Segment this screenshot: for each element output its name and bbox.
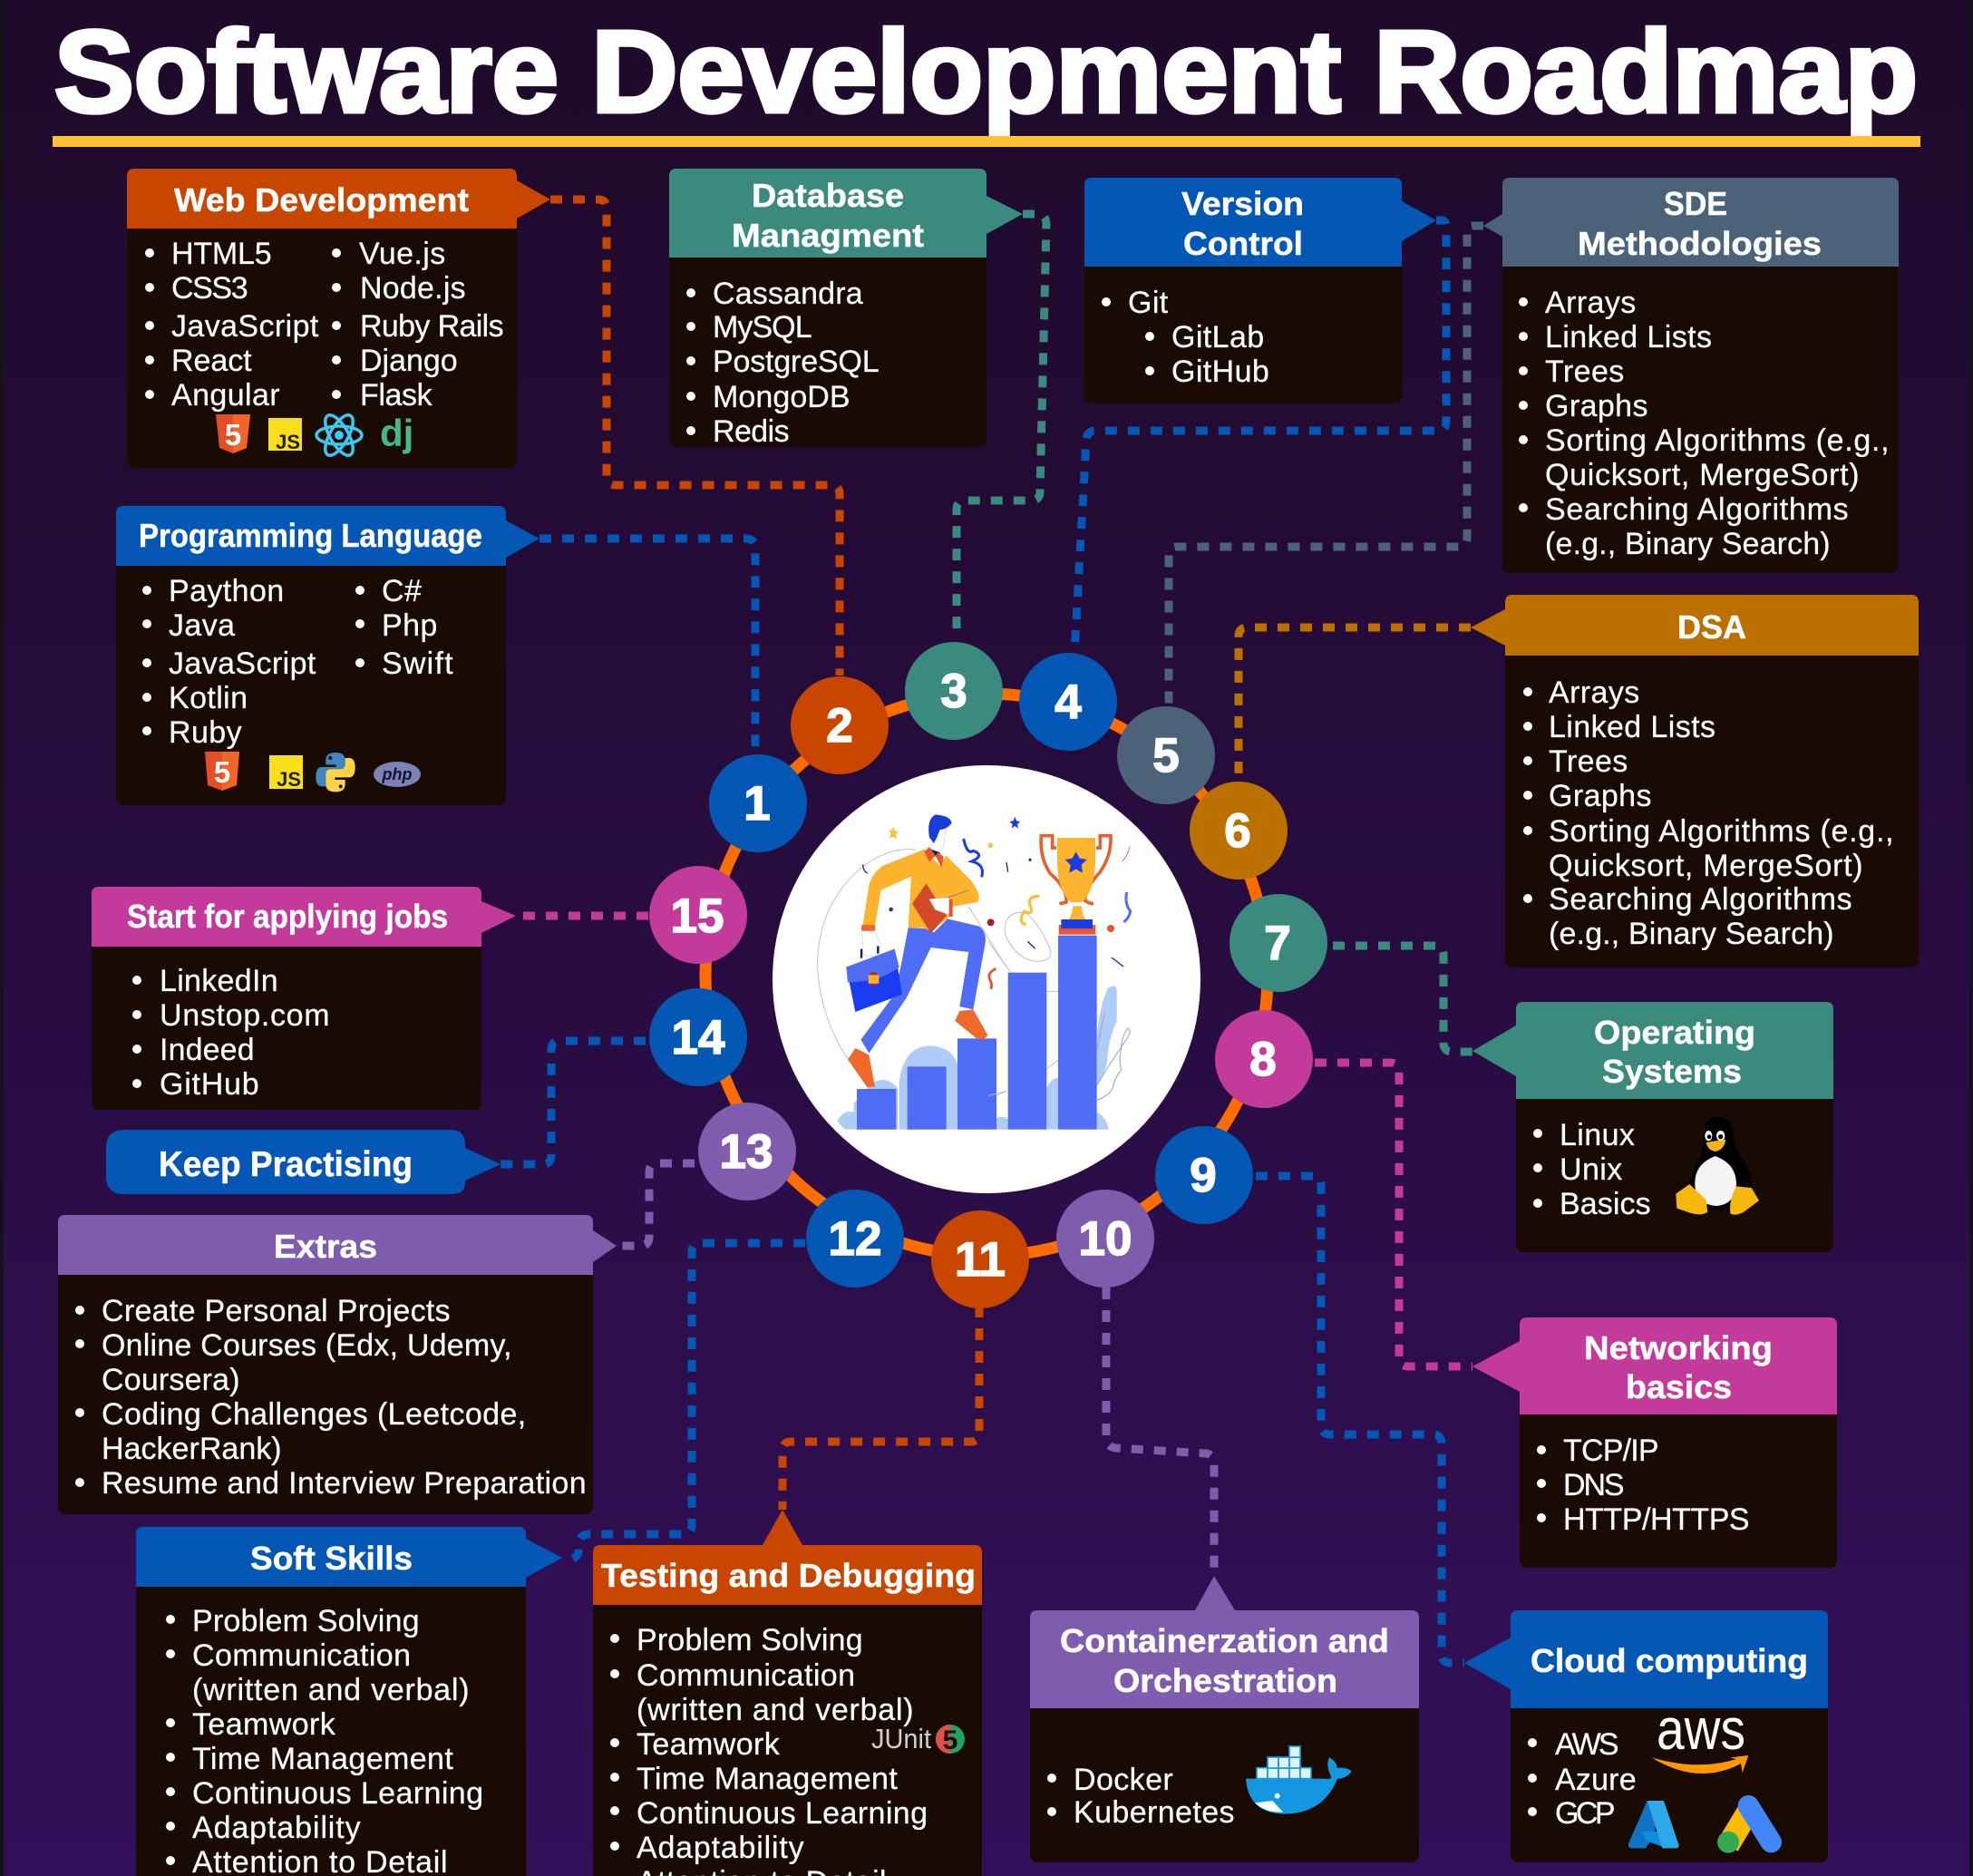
list: DSA topics: Arrays (1549, 676, 1640, 710)
numbered steps: 10 (1079, 1212, 1132, 1266)
banner: keep practising: Keep Practising (159, 1145, 413, 1184)
list: web technologies: Node.js (360, 271, 466, 306)
list: operating systems (1533, 1118, 1651, 1221)
list: operating systems: Linux (1560, 1118, 1635, 1152)
list: job sites (132, 964, 330, 1102)
heading: cloud computing (1464, 1610, 1828, 1708)
list: languages: Paython (169, 574, 285, 608)
list: testing topics: Teamwork (637, 1727, 781, 1762)
list: soft skills: Teamwork (192, 1707, 336, 1742)
title underline (53, 136, 1920, 147)
heading: containerization and orchestration (1030, 1576, 1419, 1708)
heading: start for applying jobs: Start for applying jobs (127, 898, 448, 935)
numbered steps: 9 (1190, 1149, 1217, 1202)
heading: DSA: DSA (1677, 608, 1746, 646)
list: SDE topics: Arrays (1545, 286, 1637, 320)
heading: networking basics: Networking (1584, 1329, 1773, 1366)
icon: JUnit 5: JUnit (871, 1723, 931, 1754)
ring connecting the steps (705, 694, 1268, 1256)
heading: database management: Managment (732, 217, 924, 254)
panel: cloud computing (1464, 1610, 1828, 1862)
numbered steps: 6 (1224, 804, 1251, 858)
list: databases: MySQL (713, 310, 812, 345)
list: web technologies: HTML5 (171, 237, 272, 271)
list: job sites: LinkedIn (160, 964, 278, 998)
heading: operating systems: Systems (1602, 1053, 1742, 1090)
list: web technologies: CSS3 (171, 271, 248, 306)
heading: DSA (1471, 595, 1919, 656)
heading: database management: Database (752, 177, 904, 214)
list: DSA topics: Graphs (1549, 779, 1652, 813)
panel: version control (1084, 178, 1436, 403)
list: databases: Cassandra (713, 277, 863, 311)
heading: SDE methodologies: Methodologies (1578, 225, 1822, 262)
list: job sites: Unstop.com (160, 998, 330, 1033)
list: web technologies: JavaScript (171, 309, 319, 344)
list: version control tools: GitLab (1171, 320, 1265, 355)
list: languages (142, 574, 453, 750)
icons: html5, js, react, django: dj (380, 412, 413, 454)
list: cloud providers: AWS (1555, 1727, 1619, 1762)
list: operating systems: Unix (1560, 1152, 1623, 1187)
heading: version control: Version (1181, 185, 1304, 222)
list: cloud providers: Azure (1555, 1763, 1637, 1797)
heading: testing and debugging (593, 1510, 982, 1605)
list: SDE topics: Trees (1545, 355, 1625, 389)
list: SDE topics: Searching Algorithms (1545, 492, 1849, 527)
list: web technologies: Django (360, 344, 458, 378)
list: DSA topics: Quicksort, MergeSort) (1549, 849, 1863, 883)
heading: extras: Extras (274, 1228, 377, 1265)
list: web technologies: Vue.js (359, 237, 446, 271)
list: testing topics: (written and verbal) (637, 1693, 914, 1727)
list: job sites: GitHub (160, 1067, 259, 1102)
list: databases: Redis (713, 414, 790, 449)
panel: operating systems (1472, 1002, 1833, 1252)
heading: programming language (116, 506, 539, 566)
list: testing topics (610, 1623, 928, 1876)
numbered steps: 5 (1152, 729, 1180, 782)
list: version control tools: Git (1128, 286, 1169, 320)
heading: extras (58, 1215, 617, 1275)
list: soft skills: Problem Solving (192, 1604, 420, 1638)
list: container tools: Docker (1074, 1763, 1173, 1797)
list: extras: HackerRank) (102, 1432, 282, 1466)
list: web technologies (145, 237, 504, 413)
numbered steps: 3 (940, 665, 967, 718)
numbered steps: 14 (672, 1011, 725, 1064)
heading: start for applying jobs (92, 887, 516, 947)
heading: networking basics: basics (1626, 1368, 1732, 1405)
heading: database management (669, 169, 1023, 258)
list: DSA topics: Sorting Algorithms (e.g., (1549, 814, 1894, 849)
heading: testing and debugging: Testing and Debugging (601, 1557, 976, 1594)
list: networking topics: DNS (1563, 1468, 1625, 1502)
panel: testing and debugging (593, 1510, 982, 1876)
icons: html5, js, python, php: JS (277, 768, 301, 791)
panel: networking basics (1472, 1317, 1837, 1568)
list: DSA topics: (e.g., Binary Search) (1549, 917, 1834, 951)
list: extras: Create Personal Projects (102, 1294, 451, 1328)
heading: web development: Web Development (174, 181, 469, 219)
heading: soft skills: Soft Skills (250, 1540, 413, 1577)
icon: azure (1628, 1801, 1679, 1848)
list: operating systems: Basics (1560, 1187, 1651, 1221)
heading: SDE methodologies (1483, 178, 1899, 267)
icon: aws: aws (1657, 1696, 1745, 1762)
list: soft skills: Adaptability (192, 1811, 361, 1845)
list: languages: Swift (382, 646, 453, 681)
list: web technologies: Flask (360, 378, 433, 413)
list: extras (75, 1294, 587, 1501)
icon: JUnit 5: 5 (943, 1725, 957, 1755)
list: databases: PostgreSQL (713, 345, 880, 379)
list: extras: Coding Challenges (Leetcode, (102, 1397, 527, 1432)
icons: html5, js, python, php: 5 (214, 755, 230, 789)
list: SDE topics: (e.g., Binary Search) (1545, 527, 1831, 561)
numbered steps: 15 (671, 889, 724, 943)
list: testing topics: Time Management (637, 1762, 898, 1796)
panel: DSA (1471, 595, 1919, 967)
list: job sites: Indeed (160, 1033, 255, 1067)
list: soft skills: Time Management (192, 1742, 453, 1776)
banner: keep practising (106, 1130, 501, 1194)
list: SDE topics: Quicksort, MergeSort) (1545, 458, 1860, 492)
list: networking topics: HTTP/HTTPS (1563, 1502, 1750, 1537)
numbered steps: 7 (1264, 917, 1291, 970)
panel: extras (58, 1215, 617, 1514)
panel: start for applying jobs (92, 887, 516, 1110)
list: SDE topics: Graphs (1545, 389, 1648, 423)
list: web technologies: Ruby Rails (360, 309, 504, 344)
icons: html5, js, react, django: 5 (225, 418, 241, 452)
list: SDE topics: Sorting Algorithms (e.g., (1545, 423, 1890, 458)
list: web technologies: Angular (171, 378, 280, 413)
list: version control tools: GitHub (1171, 355, 1269, 389)
heading: networking basics (1472, 1317, 1837, 1414)
list: testing topics: Communication (637, 1658, 855, 1693)
numbered steps: 11 (955, 1233, 1006, 1287)
numbered steps: 2 (826, 699, 853, 753)
numbered steps: 1 (744, 777, 771, 831)
list: DSA topics: Linked Lists (1549, 710, 1715, 744)
list: cloud providers (1528, 1727, 1637, 1831)
connectors between panels and numbered steps (501, 199, 1483, 1663)
list: networking topics: TCP/IP (1563, 1434, 1659, 1468)
list: container tools (1047, 1763, 1235, 1830)
list: languages: JavaScript (169, 646, 316, 681)
list: SDE topics (1519, 286, 1890, 561)
heading: version control: Control (1183, 225, 1303, 262)
panel: programming language (116, 506, 539, 805)
center illustration: climbing the bars to a trophy (773, 765, 1200, 1193)
panel: web development (127, 169, 550, 468)
heading: web development (127, 169, 550, 228)
list: extras: Coursera) (102, 1363, 240, 1397)
list: extras: Online Courses (Edx, Udemy, (102, 1328, 512, 1363)
numbered steps: 12 (829, 1212, 881, 1266)
panel: SDE methodologies (1483, 178, 1899, 573)
numbered steps (649, 642, 1327, 1308)
list: cloud providers: GCP (1555, 1796, 1616, 1831)
numbered steps: 13 (720, 1125, 773, 1179)
icons: html5, js, python, php (205, 752, 421, 792)
list: soft skills: Communication (192, 1638, 411, 1673)
heading: operating systems (1472, 1002, 1833, 1099)
list: soft skills: Continuous Learning (192, 1776, 483, 1811)
list: testing topics: Continuous Learning (637, 1796, 928, 1831)
list: container tools: Kubernetes (1074, 1795, 1235, 1830)
panel: soft skills (136, 1527, 562, 1876)
icon: linux penguin (1676, 1117, 1759, 1215)
numbered steps: 4 (1055, 676, 1082, 729)
list: languages: Java (169, 608, 235, 643)
heading: containerization and orchestration: Containerzation and (1060, 1622, 1389, 1659)
heading: programming language: Programming Language (139, 517, 482, 554)
list: soft skills: (written and verbal) (192, 1673, 470, 1707)
heading: SDE methodologies: SDE (1664, 185, 1727, 222)
list: version control tools (1102, 286, 1269, 389)
list: languages: C# (382, 574, 422, 608)
list: testing topics: Adaptability (637, 1831, 804, 1865)
icon: google ads (1717, 1804, 1771, 1853)
list: DSA topics (1523, 676, 1894, 951)
list: DSA topics: Trees (1549, 744, 1628, 779)
icons: html5, js, react, django (216, 411, 413, 460)
panel: database management (669, 169, 1023, 449)
panel: containerization and orchestration (1030, 1576, 1419, 1862)
heading: operating systems: Operating (1594, 1014, 1755, 1051)
list: databases (686, 277, 880, 449)
list: languages: Ruby (169, 715, 242, 750)
heading: version control (1084, 178, 1436, 267)
list: SDE topics: Linked Lists (1545, 320, 1712, 355)
list: DSA topics: Searching Algorithms (1549, 882, 1852, 917)
title: Software Development Roadmap (54, 7, 1918, 137)
icon: JUnit 5 (871, 1723, 965, 1755)
heading: cloud computing: Cloud computing (1531, 1642, 1808, 1679)
heading: soft skills (136, 1527, 562, 1587)
list: databases: MongoDB (713, 380, 850, 414)
list: networking topics (1537, 1434, 1750, 1537)
list: extras: Resume and Interview Preparation (102, 1466, 587, 1501)
list: soft skills (166, 1604, 483, 1876)
icon: docker whale (1246, 1746, 1352, 1814)
list: languages: Kotlin (169, 681, 248, 715)
list: languages: Php (382, 608, 438, 643)
icons: html5, js, react, django: JS (276, 431, 300, 453)
heading: containerization and orchestration: Orchestration (1113, 1662, 1337, 1699)
list: testing topics: Problem Solving (637, 1623, 863, 1657)
icons: html5, js, python, php: php (381, 765, 412, 783)
list: web technologies: React (171, 344, 252, 378)
numbered steps: 8 (1249, 1033, 1277, 1086)
